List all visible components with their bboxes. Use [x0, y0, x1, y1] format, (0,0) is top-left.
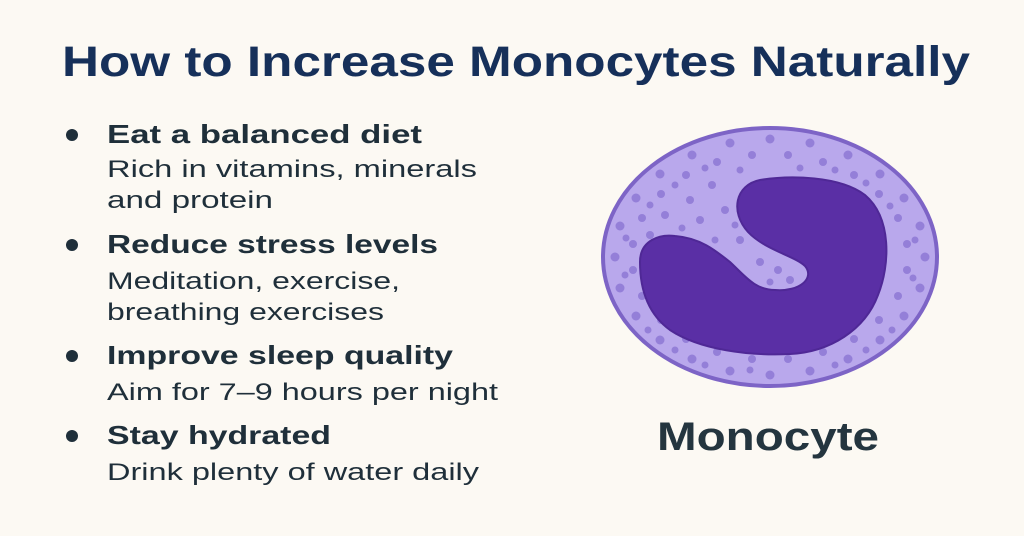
tip: reduce stress: Reduce stress levels — [107, 229, 438, 259]
tip: reduce stress — [66, 229, 438, 326]
icon: monocyte cell — [603, 128, 937, 386]
tip: sleep: Improve sleep quality — [107, 340, 454, 370]
tip: hydration: Drink plenty of water daily — [107, 459, 479, 486]
tip: reduce stress: breathing exercises — [107, 299, 384, 326]
tip: balanced diet: Eat a balanced diet — [107, 119, 422, 149]
label: Monocyte: Monocyte — [657, 415, 879, 459]
tip: balanced diet — [66, 119, 477, 214]
tip: balanced diet: Rich in vitamins, minerals — [107, 156, 477, 183]
tip: balanced diet: and protein — [107, 187, 273, 214]
tip: reduce stress: Meditation, exercise, — [107, 268, 400, 295]
tip: sleep: Aim for 7–9 hours per night — [107, 379, 498, 406]
title: How to Increase Monocytes Naturally — [62, 38, 970, 86]
list of tips — [66, 119, 498, 486]
tip: sleep — [66, 340, 498, 406]
tip: hydration — [66, 420, 479, 486]
tip: hydration: Stay hydrated — [107, 420, 331, 450]
